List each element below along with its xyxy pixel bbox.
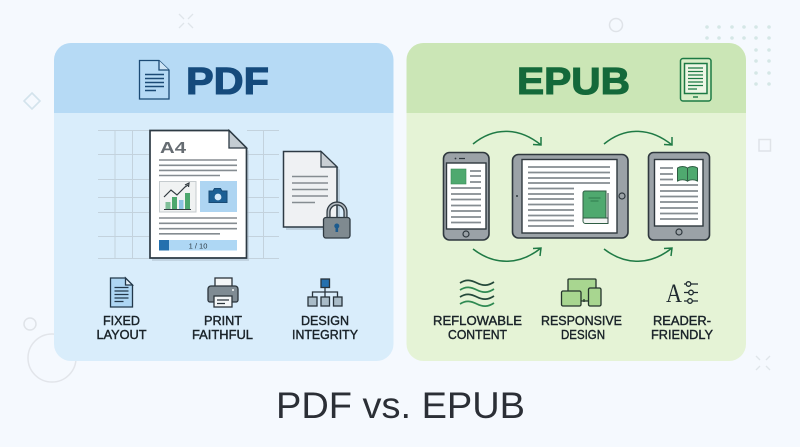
label: design integrity: DESIGN bbox=[301, 314, 349, 328]
background decorations bbox=[24, 14, 771, 382]
A4 document page bbox=[150, 130, 249, 261]
page size label: A4 bbox=[160, 140, 186, 157]
label: print faithful: FAITHFUL bbox=[192, 328, 253, 342]
feature: reflowable content bbox=[433, 280, 522, 342]
panel: PDF bbox=[54, 43, 394, 361]
panel header: PDF bbox=[54, 43, 394, 113]
icon: printer bbox=[208, 278, 238, 307]
label: responsive design: DESIGN bbox=[561, 328, 605, 342]
panel: EPUB bbox=[406, 43, 746, 361]
photo thumbnail bbox=[200, 181, 237, 212]
panel header: EPUB bbox=[406, 43, 746, 113]
panel body: PDF bbox=[54, 43, 394, 361]
icon: e-reader bbox=[680, 58, 711, 101]
icon: text settings: A bbox=[666, 279, 682, 308]
title: PDF vs. EPUB bbox=[276, 385, 525, 426]
secured document with padlock bbox=[284, 152, 350, 238]
label: responsive design: RESPONSIVE bbox=[541, 314, 622, 328]
feature: responsive design bbox=[541, 279, 622, 342]
heading: EPUB: EPUB bbox=[517, 61, 630, 103]
icon: hierarchy bbox=[308, 279, 342, 306]
device: tablet landscape bbox=[512, 154, 628, 238]
panel body: EPUB bbox=[406, 43, 746, 361]
feature: print faithful bbox=[192, 278, 253, 342]
icon: green book bbox=[583, 191, 608, 224]
page indicator bar: 1 / 10 bbox=[189, 242, 207, 250]
icon: PDF document bbox=[140, 60, 169, 99]
device: e-reader tablet bbox=[648, 152, 710, 240]
label: fixed layout: FIXED bbox=[103, 314, 140, 328]
label: reflowable content: REFLOWABLE bbox=[433, 314, 522, 328]
chart thumbnail bbox=[160, 182, 196, 212]
label: reflowable content: CONTENT bbox=[448, 328, 507, 342]
label: fixed layout: LAYOUT bbox=[96, 328, 147, 342]
flow arrows between devices bbox=[473, 131, 672, 261]
padlock bbox=[324, 204, 350, 238]
icon: waves bbox=[460, 280, 494, 306]
label: reader friendly: FRIENDLY bbox=[651, 328, 714, 342]
page grid bbox=[98, 130, 279, 258]
label: print faithful: PRINT bbox=[204, 314, 242, 328]
device: phone bbox=[444, 152, 489, 240]
heading: PDF: PDF bbox=[186, 61, 269, 103]
feature: reader friendly bbox=[651, 279, 714, 342]
feature: fixed layout bbox=[96, 278, 147, 342]
label: design integrity: INTEGRITY bbox=[292, 328, 359, 342]
icon: responsive devices bbox=[562, 279, 601, 306]
label: reader friendly: READER- bbox=[653, 314, 711, 328]
icon: fixed layout bbox=[110, 278, 132, 307]
icon: open book bbox=[678, 166, 698, 181]
feature: design integrity bbox=[292, 279, 359, 342]
